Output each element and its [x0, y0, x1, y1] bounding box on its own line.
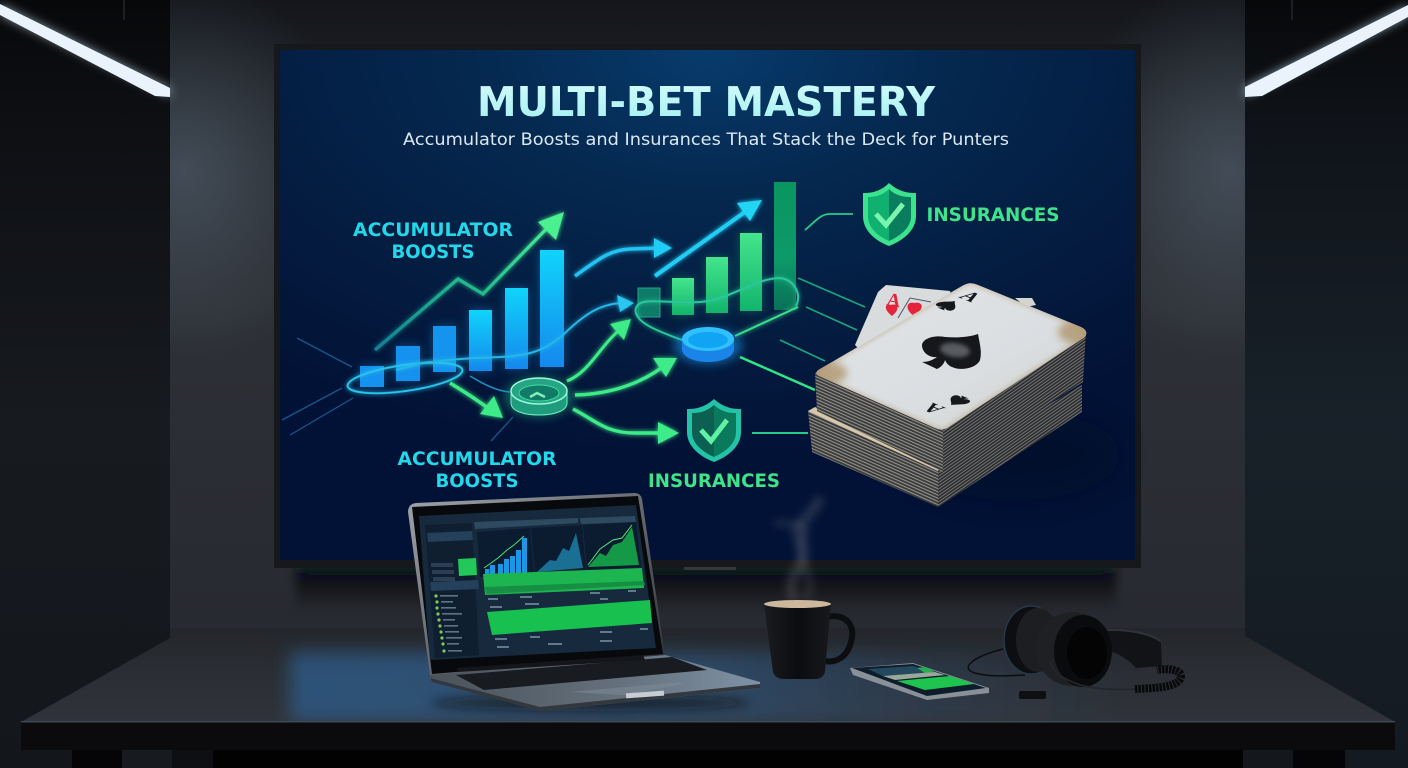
laptop — [408, 493, 760, 711]
desk front edge — [21, 721, 1395, 750]
blue bar chart — [360, 250, 564, 387]
back ear cup — [1004, 606, 1060, 674]
small dongle — [1019, 691, 1046, 699]
smartphone — [850, 663, 989, 700]
big blue arrow — [655, 200, 762, 276]
green disc node — [505, 377, 573, 417]
panel right header — [580, 516, 636, 524]
rising green line with arrow — [375, 212, 564, 350]
insurances label top: INSURANCES — [926, 204, 1060, 226]
green lines toward cards — [740, 278, 865, 390]
card deck — [803, 283, 1120, 507]
dashboard sidebar — [425, 523, 479, 658]
blue curved arrow — [575, 238, 672, 276]
top accumulator boosts label: ACCUMULATOR — [353, 219, 513, 241]
screen bezel — [274, 44, 1141, 568]
corner index top: A — [954, 288, 987, 305]
blue wave arrow into green chart — [396, 295, 634, 370]
shield icon bottom — [687, 399, 741, 462]
left wall panel — [0, 0, 170, 768]
coiled cable — [1051, 658, 1181, 690]
dashboard top bar — [474, 518, 578, 529]
tiny card behind — [1015, 298, 1036, 307]
headphones — [968, 606, 1181, 690]
table rows bottom — [495, 628, 648, 648]
corner index bottom: A — [917, 400, 950, 417]
insurances label bottom: INSURANCES — [648, 470, 780, 492]
blue loop around bars — [346, 357, 464, 399]
corner index top — [933, 288, 987, 312]
thin background lines — [282, 338, 513, 441]
red ace card behind — [855, 285, 960, 360]
under-desk strips — [72, 750, 1345, 768]
shield icon top — [863, 183, 916, 246]
ceiling light right — [1245, 5, 1408, 97]
headband — [1100, 630, 1162, 668]
laptop lid — [408, 493, 665, 675]
keyboard — [456, 657, 707, 690]
red ace card behind: A — [885, 289, 903, 312]
corner index bottom — [917, 394, 973, 417]
desk — [21, 628, 1395, 768]
table rows dark — [488, 590, 636, 608]
laptop base — [430, 655, 760, 711]
desk top — [21, 628, 1395, 722]
steam — [775, 497, 820, 600]
right wall panel — [1245, 0, 1408, 768]
wall-mounted screen — [274, 44, 1141, 570]
green loop around bars — [636, 278, 798, 340]
front ear cup — [1036, 612, 1112, 687]
green table header — [483, 568, 644, 595]
bottom accumulator boosts label — [398, 448, 557, 492]
chart blue bars — [477, 528, 534, 577]
upper deck — [815, 330, 1086, 472]
coffee mug — [764, 497, 852, 679]
laptop display — [419, 505, 656, 660]
chart teal area — [531, 525, 586, 574]
left cable — [968, 649, 1025, 676]
blue disc node — [674, 327, 742, 364]
ace of spades center — [922, 334, 981, 369]
connector top shield — [805, 214, 853, 230]
chart green area — [583, 522, 641, 571]
subtitle: Accumulator Boosts and Insurances That Stack the Deck for Punters — [403, 130, 1009, 150]
connector bottom shield — [752, 432, 808, 434]
top card face — [803, 283, 1098, 430]
top accumulator boosts label: BOOSTS — [392, 241, 474, 263]
green flow arrows — [450, 319, 679, 444]
ceiling light left — [0, 4, 170, 97]
bottom accumulator boosts label: BOOSTS — [436, 470, 518, 492]
green table block — [487, 600, 652, 635]
title: MULTI-BET MASTERY — [477, 78, 936, 126]
top accumulator boosts label — [353, 219, 513, 263]
lower deck — [808, 385, 1082, 507]
thin blue connector — [470, 376, 510, 392]
green bar chart — [638, 182, 796, 317]
wall shadow below TV — [296, 566, 1116, 612]
bottom accumulator boosts label: ACCUMULATOR — [398, 448, 557, 470]
